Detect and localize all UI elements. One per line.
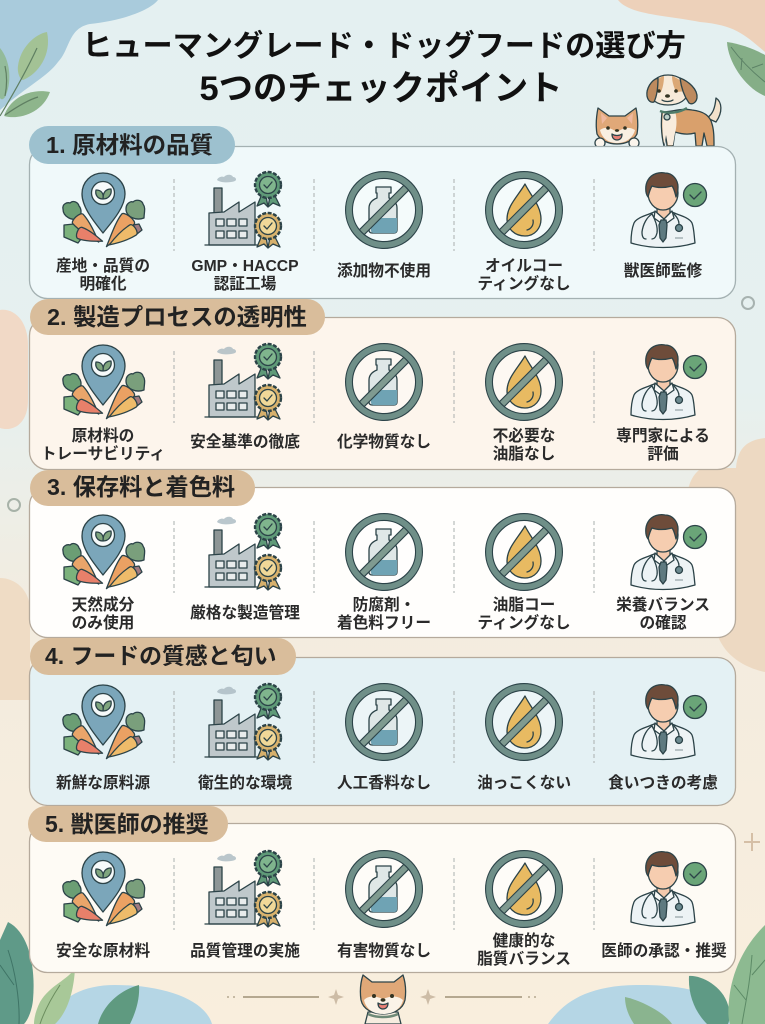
panel 3: 保存料と着色料 [30, 470, 736, 638]
panel 1: 原材料の品質 [29, 126, 736, 298]
icon: no artificial fragrance [349, 687, 419, 757]
panel 1 dividers [174, 179, 594, 251]
panel 4: フードの質感と匂い [30, 638, 736, 806]
icon: not oily [489, 687, 559, 757]
title: 5つのチェックポイント [199, 70, 563, 108]
panel 1 labels: 認証工場 [214, 275, 277, 293]
panel 5 heading [28, 806, 228, 842]
icon: no harmful substances [349, 854, 419, 924]
panel 5 labels: 有害物質なし [337, 941, 431, 960]
icon: factory with badges [205, 172, 281, 248]
panel 4 labels: 衛生的な環境 [198, 773, 292, 792]
panel 2: 製造プロセスの透明性 [30, 299, 736, 470]
icon: no additives [349, 175, 419, 245]
panel 3 labels: 栄養バランス [616, 595, 710, 614]
panel 2 labels: 評価 [647, 445, 679, 463]
panel 2 labels [41, 426, 710, 463]
panel 2 labels: トレーサビリティ [41, 444, 165, 463]
panel 3 labels: のみ使用 [72, 614, 134, 632]
small ring: right [742, 297, 754, 309]
footer ornament [227, 989, 536, 1005]
panel 4 labels: 油っこくない [477, 774, 571, 792]
panel 1 labels: オイルコー [485, 257, 563, 275]
panel 2 labels: 専門家による [616, 426, 710, 445]
icon: palatability check [631, 685, 706, 760]
icon: no preservatives [349, 517, 419, 587]
panel 4 heading [30, 638, 296, 675]
panel 3 labels: の確認 [639, 613, 687, 632]
panel 1 labels: 産地・品質の [56, 257, 150, 275]
panel 1 heading [29, 126, 235, 164]
panel 1 heading: 1. 原材料の品質 [46, 132, 213, 158]
illustration: cat-like corgi [595, 108, 639, 148]
icon: no oil [489, 175, 559, 245]
panel 3 labels: 厳格な製造管理 [190, 603, 300, 622]
panel 3 labels: 防腐剤・ [353, 596, 415, 614]
icon: pin and vegetables [63, 345, 145, 424]
icon: factory with badges [205, 514, 281, 590]
icon: expert [631, 345, 706, 420]
title: ヒューマングレード・ドッグフードの選び方 [82, 29, 686, 63]
panel 1 labels [56, 257, 703, 293]
leaves: top left [0, 32, 50, 117]
panel 4 labels [56, 773, 718, 792]
panel 3 labels: 天然成分 [72, 595, 135, 614]
panel 5 labels [56, 931, 727, 968]
panel 5 labels: 脂質バランス [477, 950, 571, 968]
panel 5: 獣医師の推奨 [28, 806, 736, 972]
panel 2 labels: 不必要な [493, 427, 555, 445]
leaves: bottom right [625, 925, 765, 1024]
panel 1 card [30, 146, 736, 298]
title [82, 29, 686, 108]
icon: pin and vegetables [63, 852, 145, 931]
panel 4 labels: 人工香料なし [337, 774, 431, 792]
panel 3 heading [30, 470, 255, 506]
icon: pin and vegetables [63, 173, 145, 252]
panel 5 labels: 品質管理の実施 [190, 941, 300, 960]
small plus [744, 833, 760, 851]
panel 1 labels: 添加物不使用 [337, 262, 431, 280]
panel 4 heading: 4. フードの質感と匂い [45, 643, 276, 669]
panel 5 card [30, 824, 736, 972]
panel 5 labels: 健康的な [493, 931, 555, 950]
icon: healthy fat balance [489, 854, 559, 924]
icon: pin and vegetables [63, 515, 145, 594]
panel 2 labels: 油脂なし [493, 445, 555, 463]
panel 4 labels: 食いつきの考慮 [608, 773, 718, 792]
panel 3 labels: 着色料フリー [337, 613, 431, 632]
icon: no chemicals [349, 347, 419, 417]
panel 4 labels: 新鮮な原料源 [56, 774, 150, 792]
panel 3 dividers [174, 521, 594, 593]
panel 1 labels: 明確化 [79, 274, 127, 293]
panel 2 heading: 2. 製造プロセスの透明性 [47, 304, 307, 330]
icon: no oil coating [489, 517, 559, 587]
panel 2 card [30, 318, 736, 470]
leaf: top right [727, 42, 765, 96]
icon: doctor approval [631, 852, 706, 926]
panel 3 labels: 油脂コー [493, 596, 555, 614]
illustration: dog [647, 75, 721, 146]
panel 3 labels [72, 595, 710, 632]
panel 2 labels: 化学物質なし [337, 432, 431, 451]
icon: factory with badges [205, 344, 281, 420]
panel 5 dividers [174, 858, 594, 930]
icon: factory with badges [205, 684, 281, 760]
icon: no oil [489, 347, 559, 417]
panel 3 labels: ティングなし [477, 613, 571, 632]
panel 3 card [30, 488, 736, 638]
illustration: bottom corgi [360, 975, 406, 1024]
panel 1 labels: 獣医師監修 [624, 262, 703, 280]
panel 4 card [30, 658, 736, 806]
icon: veterinarian [631, 173, 706, 248]
panel 2 heading [30, 299, 325, 335]
panel 3 heading: 3. 保存料と着色料 [47, 474, 235, 500]
panel 5 heading: 5. 獣医師の推奨 [45, 811, 209, 837]
panel 5 labels: 医師の承認・推奨 [601, 942, 727, 960]
panel 2 dividers [174, 351, 594, 423]
leaves: bottom left [0, 922, 139, 1024]
icon: nutrition check [631, 515, 706, 590]
icon: factory with badges [205, 851, 281, 927]
icon: pin and vegetables [63, 685, 145, 764]
panel 4 dividers [174, 691, 594, 763]
panel 1 labels: ティングなし [477, 274, 571, 293]
panel 2 labels: 安全基準の徹底 [190, 432, 300, 451]
panel 1 labels: GMP・HACCP [191, 258, 299, 275]
panel 5 labels: 安全な原材料 [56, 941, 150, 960]
panel 2 labels: 原材料の [72, 426, 134, 445]
small ring: left [8, 499, 20, 511]
